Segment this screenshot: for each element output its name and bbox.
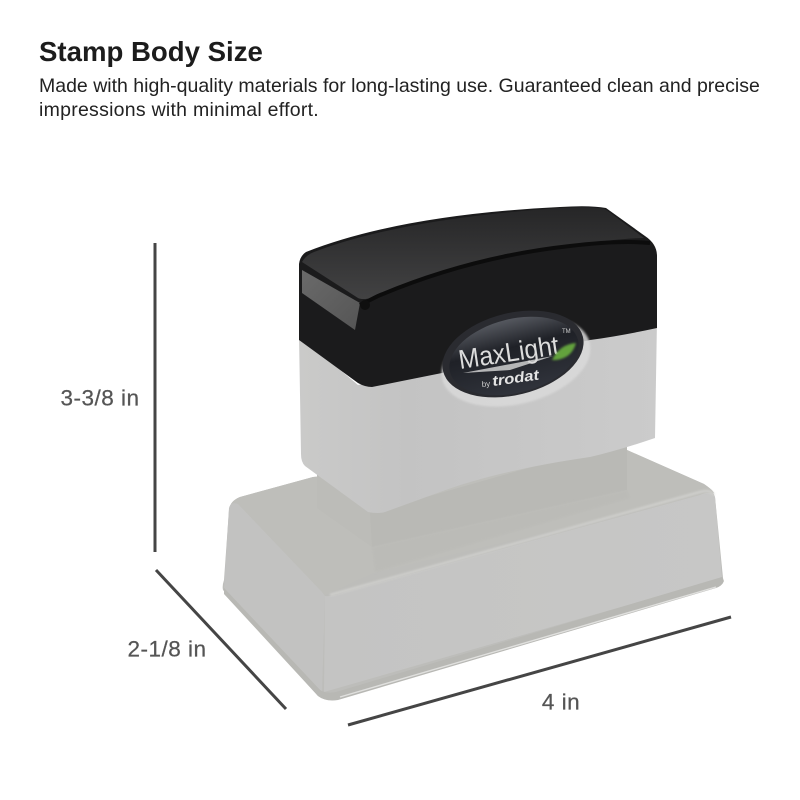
logo oval: TM	[562, 329, 571, 335]
title: Stamp Body Size	[39, 36, 263, 67]
stamp black cap	[299, 206, 657, 387]
logo text: MaxLight	[456, 330, 561, 375]
logo oval: by	[481, 379, 491, 389]
logo oval	[432, 297, 600, 421]
depth label: 2-1/8 in	[127, 636, 207, 662]
height dimension line	[154, 243, 156, 552]
description text: Made with high-quality materials for long-lasting use. Guaranteed clean and precise	[39, 75, 760, 97]
width label: 4 in	[542, 690, 580, 714]
height label: 3-3/8 in	[60, 386, 140, 410]
description text: impressions with minimal effort.	[39, 99, 319, 121]
stamp grip body	[299, 320, 657, 513]
depth dimension line	[156, 570, 286, 709]
stamp neck	[317, 440, 630, 572]
stamp base	[223, 450, 724, 700]
description text	[39, 75, 760, 121]
logo oval: trodat	[491, 367, 541, 390]
width dimension line	[348, 617, 731, 725]
